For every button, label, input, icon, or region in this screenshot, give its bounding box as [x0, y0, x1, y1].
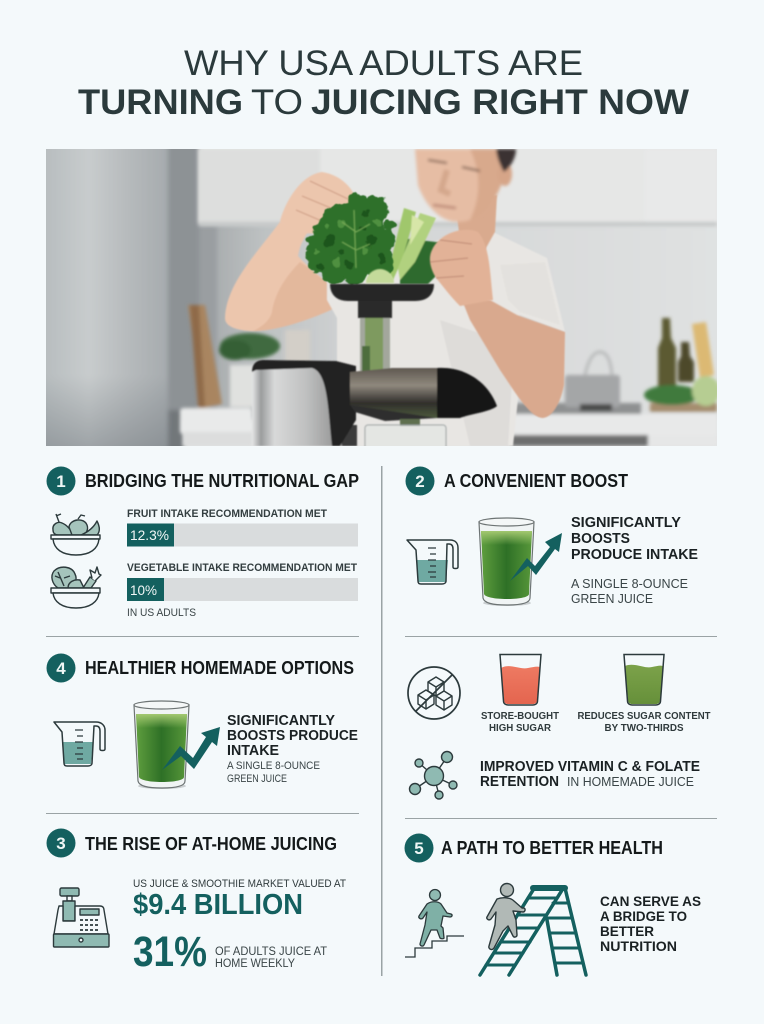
vitamin text: RETENTION	[480, 774, 559, 790]
icon: molecule	[410, 752, 457, 799]
boost text: BOOSTS	[571, 531, 630, 547]
fruit bar: 12.3%	[130, 528, 169, 543]
sugar reduction label: REDUCES SUGAR CONTENT	[578, 710, 711, 722]
hero photo: woman feeding greens into a juicer	[46, 149, 717, 446]
badge 4: 4	[56, 659, 66, 678]
badge 1: 1	[56, 472, 66, 491]
icon: red store-bought juice glass	[500, 654, 541, 705]
left arm	[224, 222, 322, 332]
juicer feed tube	[358, 300, 392, 318]
icon: person climbing stairs	[405, 890, 464, 957]
bridge text: NUTRITION	[600, 939, 677, 955]
boost text: SIGNIFICANTLY	[227, 713, 335, 729]
store-bought label: STORE-BOUGHT	[481, 710, 560, 722]
title	[78, 44, 689, 122]
kale	[306, 193, 396, 285]
icon: vegetable bowl	[51, 567, 101, 608]
fruit bar	[127, 524, 358, 546]
bridge text: A BRIDGE TO	[600, 909, 687, 925]
store-bought label	[481, 710, 560, 734]
sugar reduction label	[578, 710, 711, 734]
heading 1: BRIDGING THE NUTRITIONAL GAP	[85, 471, 359, 491]
icon: ladder	[480, 887, 586, 975]
right counter items	[513, 414, 717, 436]
icon: cash register	[54, 888, 109, 947]
panel: sugar comparison and vitamins	[408, 654, 711, 799]
store-bought label: HIGH SUGAR	[489, 722, 551, 734]
badge 2	[406, 466, 434, 496]
heading 4: HEALTHIER HOMEMADE OPTIONS	[85, 658, 354, 678]
stat: market value: $9.4 BILLION	[133, 889, 303, 921]
bridge text: BETTER	[600, 924, 654, 940]
market label: US JUICE & SMOOTHIE MARKET VALUED AT	[133, 878, 346, 890]
bars note: IN US ADULTS	[127, 607, 196, 619]
title: TO	[251, 83, 303, 122]
column divider	[381, 466, 382, 976]
badge 1	[46, 466, 76, 496]
serving text: A SINGLE 8-OUNCE	[227, 760, 320, 772]
serving text: A SINGLE 8-OUNCE	[571, 576, 688, 591]
icon: no sugar cubes	[408, 667, 460, 719]
serving text	[571, 576, 688, 606]
panel 4: healthier homemade options	[46, 654, 358, 789]
icon: measuring cup	[54, 722, 105, 766]
vegetable bar: 10%	[130, 583, 157, 598]
boost text: PRODUCE INTAKE	[571, 547, 698, 563]
boost text: INTAKE	[227, 743, 279, 759]
vegetable label: VEGETABLE INTAKE RECOMMENDATION MET	[127, 562, 357, 574]
serving text	[227, 760, 320, 785]
heading 5: A PATH TO BETTER HEALTH	[441, 838, 663, 858]
badge 3	[46, 828, 76, 858]
badge 5: 5	[414, 839, 424, 858]
sugar reduction label: BY TWO-THIRDS	[604, 722, 684, 734]
right arm	[460, 295, 565, 418]
panel 5: a path to better health	[404, 834, 701, 975]
vitamin text: IN HOMEMADE JUICE	[567, 774, 694, 789]
arrow: upward trend	[162, 727, 220, 770]
serving text: GREEN JUICE	[227, 773, 287, 785]
boost text: SIGNIFICANTLY	[571, 515, 681, 531]
stat: weekly juicers: 31%	[133, 928, 207, 976]
vegetable bar	[127, 578, 358, 601]
icon: person climbing ladder	[487, 884, 525, 949]
serving text: GREEN JUICE	[571, 591, 653, 606]
title: JUICING RIGHT NOW	[311, 83, 689, 122]
panel 1: bridging the nutritional gap	[46, 466, 359, 619]
vitamin text	[480, 759, 700, 790]
collection glass	[364, 424, 448, 446]
icon: measuring cup	[407, 540, 458, 584]
neck and face	[455, 195, 497, 250]
weekly juicers label	[215, 946, 327, 970]
title: WHY USA ADULTS ARE	[184, 44, 583, 83]
badge 4	[46, 654, 76, 682]
badge 5	[404, 834, 434, 862]
bridge text	[600, 894, 701, 955]
boost text	[227, 713, 358, 759]
bridge text: CAN SERVE AS	[600, 894, 701, 910]
vitamin text: IMPROVED VITAMIN C & FOLATE	[480, 759, 700, 775]
juicer auger and spout	[350, 368, 437, 418]
icon: green homemade juice glass	[624, 654, 664, 705]
badge 2: 2	[415, 472, 425, 491]
left hand	[280, 172, 356, 234]
icon: fruit bowl	[51, 514, 100, 555]
t-shirt	[327, 232, 565, 446]
celery and cucumber	[399, 238, 438, 284]
boost text: BOOSTS PRODUCE	[227, 728, 358, 744]
weekly juicers label: OF ADULTS JUICE AT	[215, 946, 327, 958]
icon: glass of green juice	[134, 701, 189, 789]
juicer hopper	[330, 284, 434, 301]
arrow: upward trend	[510, 533, 562, 581]
right hand	[430, 230, 493, 306]
boost text	[571, 515, 698, 563]
juicer body	[252, 360, 342, 446]
juicer base	[340, 424, 358, 446]
heading 3: THE RISE OF AT-HOME JUICING	[85, 834, 337, 854]
title: TURNING	[78, 83, 243, 122]
infographic	[46, 50, 717, 977]
icon: glass of green juice	[479, 518, 534, 606]
heading 2: A CONVENIENT BOOST	[444, 471, 628, 491]
fruit label: FRUIT INTAKE RECOMMENDATION MET	[127, 508, 327, 520]
wood board	[188, 305, 222, 408]
weekly juicers label: HOME WEEKLY	[215, 958, 295, 970]
badge 3: 3	[56, 834, 66, 853]
panel 2: a convenient boost	[406, 466, 698, 606]
panel 3: the rise of at-home juicing	[46, 828, 346, 976]
